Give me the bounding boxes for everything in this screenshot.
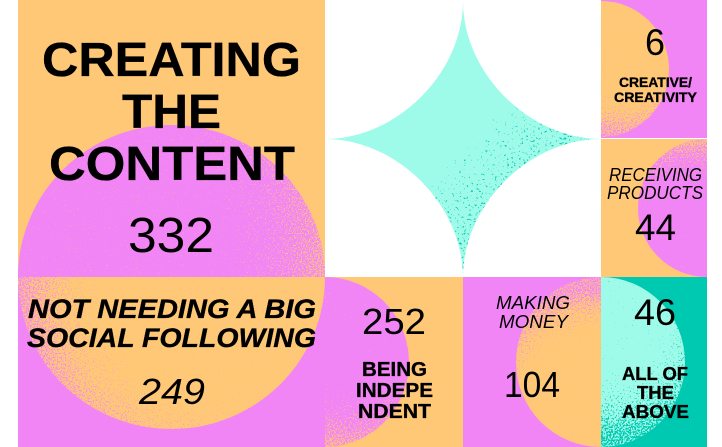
- label: receiving products: [607, 165, 703, 203]
- label: receiving products: RECEIVING: [609, 165, 702, 185]
- panel: receiving products: [601, 139, 707, 277]
- icon: four-point star: [325, 1, 601, 277]
- label: not needing a big social following: NOT NEEDING A BIG: [28, 294, 316, 324]
- panel: creating the content: [18, 0, 325, 277]
- number: 249: 249: [138, 371, 205, 412]
- label: receiving products: PRODUCTS: [607, 183, 703, 203]
- label: not needing a big social following: [27, 294, 316, 353]
- label: being independent: BEING: [362, 359, 427, 381]
- panel: all of the above: [601, 277, 707, 447]
- panel: making money: [463, 277, 601, 447]
- label: all of the above: ALL OF: [622, 364, 688, 384]
- label: making money: [496, 293, 570, 332]
- heading: creating the content: CONTENT: [49, 138, 295, 191]
- number: 104: 104: [504, 364, 560, 405]
- heading: creating the content: [42, 34, 301, 191]
- number: 46: 46: [634, 292, 676, 333]
- number: 6: 6: [645, 22, 665, 63]
- label: all of the above: ABOVE: [622, 402, 689, 422]
- panel: being independent: [325, 277, 463, 447]
- label: making money: MONEY: [499, 312, 570, 332]
- panel: creative/creativity: [601, 0, 707, 138]
- number: 332: 332: [128, 209, 214, 263]
- label: creative/creativity: CREATIVITY: [614, 89, 698, 105]
- label: creative/creativity: CREATIVE/: [619, 74, 692, 90]
- label: not needing a big social following: SOCIAL FOLLOWING: [27, 323, 316, 353]
- heading: creating the content: THE: [122, 86, 221, 139]
- label: making money: MAKING: [496, 293, 570, 313]
- label: all of the above: [622, 364, 689, 422]
- number: 44: 44: [635, 207, 676, 248]
- number: 252: 252: [362, 301, 426, 342]
- label: being independent: INDEPE: [356, 380, 433, 402]
- label: creative/creativity: [614, 74, 698, 105]
- label: being independent: NDENT: [358, 401, 431, 423]
- heading: creating the content: CREATING: [42, 34, 301, 87]
- label: all of the above: THE: [637, 383, 674, 403]
- label: being independent: [356, 359, 433, 423]
- panel: not needing a big social following: [18, 277, 325, 447]
